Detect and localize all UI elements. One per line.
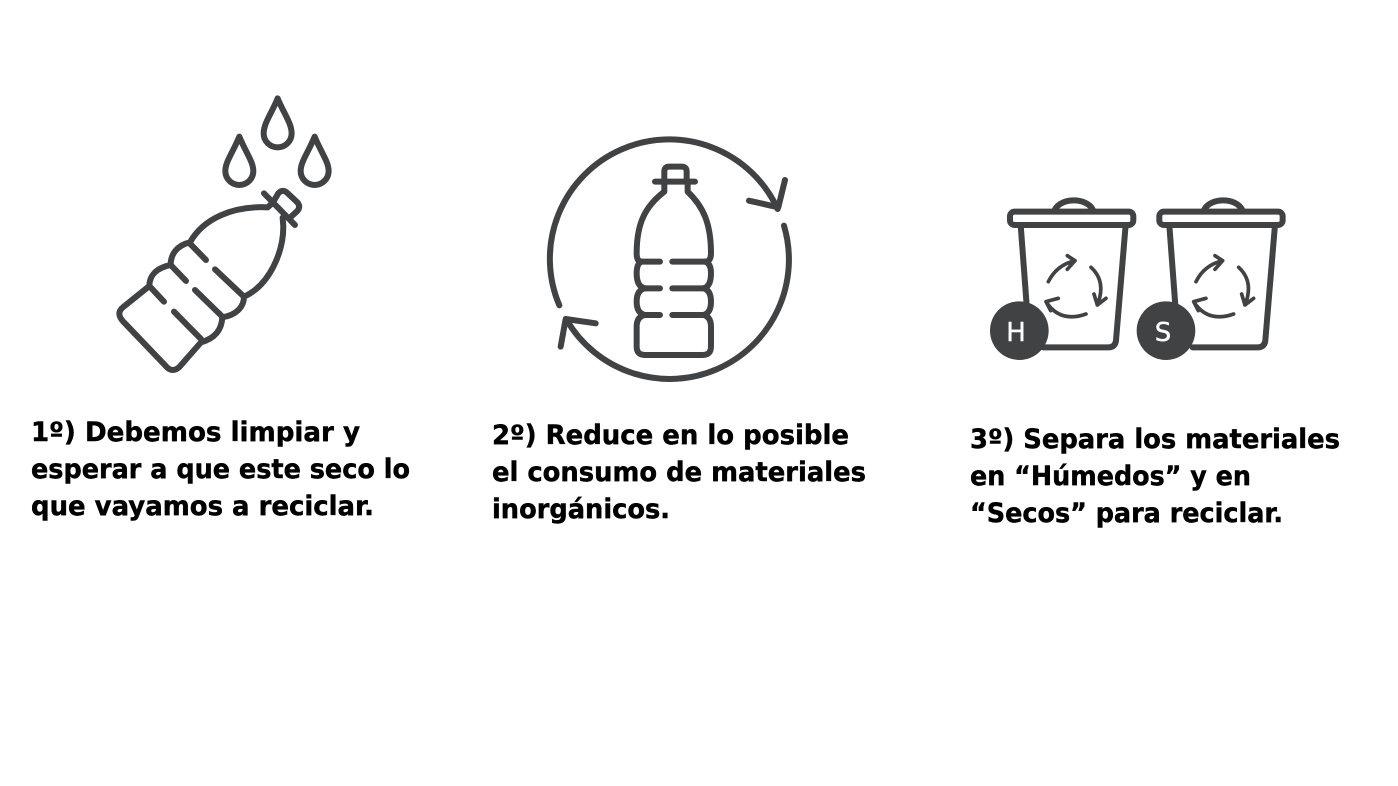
step 2 text: 2º) Reduce en lo posible: [492, 420, 849, 451]
icon: bottle inside recycling circle: [550, 139, 789, 379]
panel: step 3: [970, 200, 1340, 529]
step 1 text: 1º) Debemos limpiar y: [31, 417, 360, 448]
step 3 text: 3º) Separa los materiales: [970, 424, 1340, 455]
step 1 text: [31, 417, 410, 522]
step 3 text: [970, 424, 1340, 529]
panel: step 1: [31, 98, 410, 522]
icon: dry waste bin: [1137, 200, 1283, 360]
step 1 text: que vayamos a reciclar.: [31, 491, 374, 522]
label: H: H: [1006, 318, 1026, 348]
step 3 text: “Secos” para reciclar.: [970, 498, 1283, 529]
step 2 text: el consumo de materiales: [492, 457, 866, 488]
icon: bottle being drained with water drops: [119, 98, 329, 370]
label: S: S: [1155, 318, 1171, 348]
panel: step 2: [492, 139, 866, 525]
step 1 text: esperar a que este seco lo: [31, 454, 410, 485]
step 2 text: inorgánicos.: [492, 494, 670, 525]
icon: wet waste bin: [990, 200, 1133, 360]
step 3 text: en “Húmedos” y en: [970, 461, 1251, 492]
step 2 text: [492, 420, 866, 525]
